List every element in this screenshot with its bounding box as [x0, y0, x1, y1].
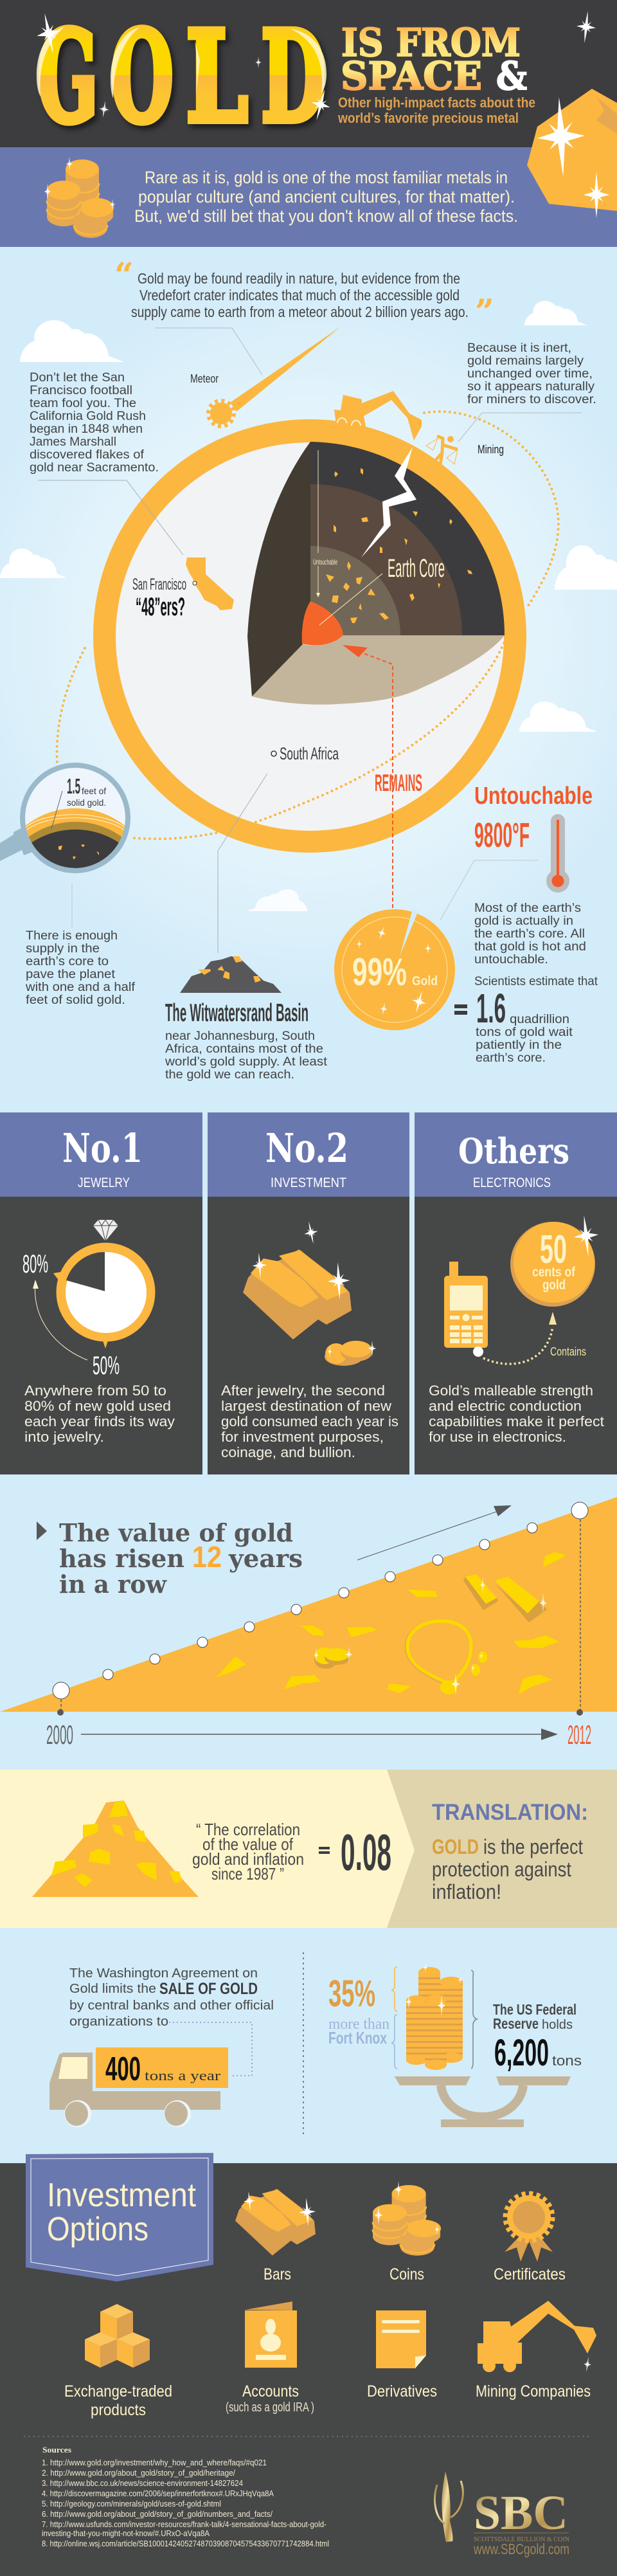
title highlights	[37, 27, 326, 98]
date guides	[57, 1519, 583, 1716]
heading: Others	[458, 1130, 569, 1172]
basin text: Africa, contains most of the	[165, 1042, 323, 1056]
panel: jewelry: 80%	[22, 1250, 48, 1278]
body text: Gold’s malleable strength	[429, 1383, 593, 1399]
35 percent more than fort knox: more than	[328, 2016, 389, 2033]
text: most of the earth's gold: untouchable.	[474, 953, 548, 966]
subtitle: Other high-impact facts about the	[338, 95, 535, 111]
panel: electronics	[415, 1112, 617, 1474]
federal reserve	[328, 1963, 582, 2127]
sources: 8. http://online.wsj.com/article/SB10001424052748703908704575433670771742884.html	[42, 2539, 329, 2548]
subheading: INVESTMENT	[271, 1175, 346, 1190]
sparkles	[251, 1220, 377, 1358]
quote text: Vredefort crater indicates that much of the accessible gold	[139, 287, 460, 304]
text: because it is inert: Because it is inert,	[467, 341, 571, 355]
sources: 2. http://www.gold.org/about_gold/story_of_gold/heritage/	[42, 2469, 235, 2478]
text: Gold limits the	[69, 1982, 156, 1996]
option: certificates: Certificates	[494, 2265, 566, 2283]
400 tons a year: 400	[105, 2051, 141, 2088]
text: san francisco football: Don’t let the San	[30, 371, 125, 385]
outer core layer	[310, 546, 400, 635]
mining label: Mining	[478, 443, 504, 456]
washington agreement	[49, 1966, 274, 2127]
translation text: TRANSLATION:	[432, 1800, 588, 1825]
text: enough supply	[25, 884, 136, 1007]
1.6 quadrillion tons: earth’s core.	[476, 1051, 546, 1065]
option: bars: Bars	[264, 2265, 291, 2283]
translation panel	[387, 1770, 617, 1928]
text: because it is inert: so it appears naturally	[467, 380, 595, 394]
option: accounts	[226, 2301, 314, 2415]
panel: investment options	[0, 2153, 617, 2576]
subtitle	[337, 95, 535, 126]
body text	[221, 1383, 398, 1460]
option: accounts: Accounts	[242, 2382, 299, 2400]
icon: gold mound	[32, 1800, 199, 1897]
body text: for use in electronics.	[429, 1429, 566, 1445]
icon: truck: tons a year	[145, 2067, 221, 2083]
body text: capabilities make it perfect	[429, 1413, 604, 1429]
untouchable pointer: Untouchable	[313, 558, 337, 567]
1.5 feet of solid gold label: feet of	[82, 786, 106, 796]
text: enough supply: pave the planet	[26, 968, 116, 981]
left wall	[247, 442, 310, 696]
correlation quote	[192, 1820, 304, 1883]
gold necklace	[406, 1621, 487, 1694]
data points	[53, 1502, 588, 1699]
time axis: 2000	[46, 1719, 73, 1750]
icon: coin stacks	[406, 1963, 463, 2070]
translation text: is the perfect	[483, 1835, 583, 1858]
sources: 5. http://geology.com/minerals/gold/uses-of-gold.shtml	[42, 2499, 221, 2508]
text: because it is inert: gold remains largely	[467, 354, 584, 368]
body text: coinage, and bullion.	[221, 1444, 355, 1460]
sky background	[0, 247, 617, 1112]
text: san francisco football: discovered flakes of	[30, 448, 145, 462]
title: GOLD: O	[111, 3, 174, 150]
reserve text	[493, 2001, 582, 2074]
dotted orbit paths	[57, 412, 559, 839]
text: enough supply: supply in the	[26, 942, 100, 956]
inner core	[302, 601, 343, 646]
braces	[391, 1967, 477, 2069]
equals 0.08: 0.08	[341, 1824, 391, 1881]
text: REMAINS	[375, 770, 422, 796]
witwatersrand basin: The Witwatersrand Basin	[165, 999, 308, 1027]
sparkles: header	[33, 10, 609, 218]
lightning crack	[361, 447, 416, 558]
opening quote mark: “	[114, 256, 134, 295]
option: coins	[373, 2181, 441, 2283]
1.6 quadrillion tons: 1.6	[476, 985, 506, 1031]
globe: Earth Core	[388, 554, 445, 583]
meteor label: Meteor	[190, 372, 219, 385]
heading marker	[37, 1521, 47, 1540]
globe	[93, 419, 526, 853]
basin text: near Johannesburg, South	[165, 1029, 315, 1043]
basin text: the gold we can reach.	[165, 1068, 294, 1082]
body text: for investment purposes,	[221, 1429, 384, 1445]
body text: each year finds its way	[24, 1413, 175, 1429]
text: san francisco football	[30, 371, 159, 475]
correlation quote: “ The correlation	[196, 1820, 300, 1839]
option: exchange-traded products: products	[91, 2401, 146, 2419]
clouds	[0, 301, 617, 911]
title: GOLD: D	[261, 3, 326, 150]
coin: 50 cents of gold: 50	[540, 1228, 567, 1272]
map: california: “48”ers?	[136, 593, 185, 621]
body text: largest destination of new	[221, 1398, 391, 1414]
translation text: GOLD	[432, 1835, 479, 1858]
heading: No.2	[265, 1125, 348, 1172]
label 50%: 50%	[93, 1352, 120, 1380]
body text: gold consumed each year is	[221, 1413, 398, 1429]
body text: and electric conduction	[429, 1398, 582, 1414]
body text	[24, 1383, 175, 1445]
text: because it is inert	[467, 341, 596, 406]
time axis	[46, 1719, 591, 1750]
sources	[42, 2445, 329, 2548]
reserve text: holds	[542, 2018, 573, 2032]
heading: 12	[192, 1540, 222, 1574]
sources: investing-that-you-might-not-know/#.URxO-aVqa8A	[42, 2529, 210, 2538]
heading: years	[228, 1544, 303, 1573]
banner	[26, 2153, 213, 2281]
subheading: ELECTRONICS	[473, 1175, 551, 1190]
sources: 4. http://discovermagazine.com/2006/sep/innerfortknox#.URxJHqVqa8A	[42, 2489, 274, 2498]
sources: 1. http://www.gold.org/investment/why_how_and_where/faqs/#q021	[42, 2458, 267, 2467]
icon: truck	[49, 2047, 228, 2127]
35 percent more than fort knox: 35%	[328, 1973, 375, 2015]
equals 0.08	[319, 1824, 391, 1881]
1.5 feet of solid gold label: 1.5	[67, 774, 80, 798]
text: enough supply: There is enough	[26, 929, 118, 943]
text: san francisco football: California Gold Rush	[30, 410, 146, 423]
basin text	[165, 1029, 328, 1082]
99 percent gold coin	[334, 909, 455, 1030]
contains arrow	[473, 1312, 586, 1364]
sources: 3. http://www.bbc.co.uk/news/science-environment-14827624	[42, 2479, 243, 2488]
closing quote mark: ”	[475, 293, 494, 332]
text	[69, 1966, 274, 2029]
untouchable pointer	[313, 450, 337, 597]
text: The Washington Agreement on	[69, 1966, 258, 1981]
icon: ring chart	[53, 1220, 156, 1348]
icon: gold nugget	[527, 89, 617, 211]
icon: excavator on globe	[334, 391, 422, 440]
icon: scale	[395, 2076, 571, 2127]
panel: correlation	[0, 1770, 617, 1928]
sparkles	[314, 1577, 547, 1696]
crust layer	[310, 442, 505, 635]
label: south africa: South Africa	[280, 744, 339, 763]
arrow: 50 to 80	[33, 1280, 87, 1360]
mining label	[458, 413, 582, 456]
text: organizations to	[69, 2015, 168, 2029]
banner: Investment	[47, 2177, 196, 2214]
logo: SBC: SCOTTSDALE BULLION & COIN	[474, 2535, 569, 2543]
gold bars	[463, 1574, 547, 1622]
icon: gold nuggets	[325, 1341, 373, 1366]
heading: No.1	[62, 1125, 143, 1172]
text: san francisco football: James Marshall	[30, 435, 116, 449]
text: enough supply: earth’s core to	[26, 955, 109, 968]
subheading: JEWELRY	[78, 1175, 130, 1190]
title: is from space: SPACE	[341, 54, 482, 99]
icon: gold bars	[243, 1249, 352, 1339]
intro band	[0, 147, 617, 247]
99 percent gold coin: 99%	[352, 950, 407, 993]
option: certificates	[494, 2194, 566, 2283]
gold coins	[314, 1647, 350, 1669]
mantle layer	[310, 484, 462, 635]
banner: Options	[47, 2211, 148, 2248]
translation text: protection against	[432, 1858, 571, 1881]
earth core label	[319, 554, 445, 625]
quote text: Gold may be found readily in nature, but evidence from the	[138, 270, 460, 287]
heading: The value of gold	[59, 1518, 293, 1547]
text: SALE OF GOLD	[159, 1980, 258, 1998]
body text: Anywhere from 50 to	[24, 1383, 166, 1399]
title: GOLD: G	[37, 3, 98, 150]
body text: into jewelry.	[24, 1429, 104, 1445]
reserve text: 6,200	[494, 2032, 549, 2074]
option: coins: Coins	[389, 2265, 424, 2283]
icon: coin stacks	[47, 159, 114, 238]
99 percent gold coin: Gold	[412, 974, 438, 988]
translation text	[432, 1800, 588, 1903]
gold scraps	[216, 1552, 565, 1694]
basin text: world’s gold supply. At least	[165, 1055, 328, 1069]
san francisco label: San Francisco	[132, 576, 186, 594]
option: exchange-traded products: Exchange-traded	[64, 2382, 172, 2400]
label: south africa	[271, 744, 339, 763]
correlation quote: since 1987 ”	[211, 1864, 284, 1883]
reserve text: Reserve	[493, 2015, 539, 2032]
remains arrow	[343, 645, 422, 908]
text: most of the earth's gold: Scientists estimate that	[474, 975, 598, 988]
translation text: inflation!	[432, 1880, 501, 1903]
quote	[114, 256, 494, 332]
map: california	[132, 558, 234, 621]
coin: 50 cents of gold	[510, 1214, 600, 1307]
text: by central banks and other official	[69, 1999, 274, 2013]
option: mining companies: Mining Companies	[476, 2382, 591, 2400]
text: most of the earth's gold: gold is actually in	[474, 914, 573, 928]
sources: 7. http://www.usfunds.com/investor-resources/frank-talk/4-sensational-facts-about-gold-	[42, 2520, 326, 2529]
coin: 50 cents of gold: gold	[542, 1278, 566, 1293]
text: because it is inert: for miners to discover.	[467, 393, 596, 406]
icon: miner	[426, 436, 458, 464]
correlation quote: of the value of	[202, 1835, 294, 1854]
logo: SBC	[434, 2471, 569, 2557]
35 percent more than fort knox	[328, 1973, 389, 2047]
option: derivatives: Derivatives	[367, 2382, 437, 2400]
witwatersrand basin	[165, 774, 328, 1082]
header band	[0, 0, 617, 150]
icon: mountain	[180, 956, 282, 993]
text: san francisco football: gold near Sacramento.	[30, 461, 159, 475]
panel: jewelry	[0, 1112, 202, 1474]
icon: thermometer	[546, 814, 569, 893]
text: 9800°F	[474, 816, 530, 855]
meteor	[155, 327, 341, 426]
sources: Sources	[42, 2445, 71, 2454]
option: derivatives	[367, 2310, 437, 2400]
correlation quote: gold and inflation	[192, 1849, 304, 1869]
text: most of the earth's gold	[474, 902, 598, 988]
heading	[59, 1518, 303, 1599]
option: accounts: (such as a gold IRA )	[226, 2400, 314, 2415]
text: enough supply: with one and a half	[25, 981, 136, 994]
reserve text: tons	[552, 2053, 582, 2069]
option: bars	[235, 2189, 317, 2283]
intro text: Rare as it is, gold is one of the most familiar metals in	[145, 168, 508, 187]
quote text: supply came to earth from a meteor about 2 billion years ago.	[131, 304, 469, 320]
intro text	[134, 168, 518, 226]
text: san francisco football: began in 1848 when	[30, 422, 143, 436]
text: san francisco football: team fool you. The	[30, 397, 136, 410]
title: is from space: &	[496, 54, 527, 99]
text: san francisco football: Francisco football	[30, 384, 132, 397]
title: GOLD: L	[186, 3, 248, 150]
intro text: popular culture (and ancient cultures, for that matter).	[138, 187, 515, 206]
text: enough supply: feet of solid gold.	[26, 993, 125, 1007]
icon: phone	[444, 1262, 488, 1348]
1.6 quadrillion tons: quadrillion	[510, 1013, 569, 1026]
1.5 feet of solid gold label	[67, 774, 106, 808]
text: because it is inert: unchanged over time,	[467, 367, 593, 381]
magnifier	[0, 763, 130, 873]
quote text	[131, 270, 469, 320]
body text: After jewelry, the second	[221, 1383, 385, 1399]
35 percent more than fort knox: Fort Knox	[328, 2028, 387, 2047]
1.6 quadrillion tons: patiently in the	[476, 1039, 562, 1052]
1.6 quadrillion tons: tons of gold wait	[476, 1026, 573, 1039]
logo: SBC: www.SBCgold.com	[473, 2541, 569, 2557]
heading: has risen	[59, 1544, 184, 1573]
1.5 feet of solid gold label: solid gold.	[67, 797, 106, 808]
trend arrow	[357, 1505, 512, 1560]
gold flecks	[326, 468, 472, 623]
title: is from space: IS FROM	[341, 21, 521, 66]
title: GOLD	[37, 3, 326, 150]
panel: investment	[208, 1112, 409, 1474]
option: mining companies	[476, 2301, 596, 2400]
1.6 quadrillion tons	[454, 985, 573, 1065]
text: most of the earth's gold: the earth’s core. All	[474, 927, 585, 941]
intro text: But, we'd still bet that you don't know all of these facts.	[134, 206, 518, 226]
chart: value of gold rising	[0, 1497, 617, 1750]
logo: SBC: SBC	[474, 2486, 568, 2540]
reserve text: The US Federal	[493, 2001, 577, 2018]
subtitle: world’s favorite precious metal	[337, 110, 519, 126]
text: most of the earth's gold: Most of the earth’s	[474, 902, 581, 915]
coin: 50 cents of gold: cents of	[532, 1265, 576, 1280]
title: is from space	[341, 21, 527, 99]
body text: 80% of new gold used	[24, 1398, 171, 1414]
text: most of the earth's gold: that gold is hot and	[474, 940, 586, 954]
heading: in a row	[59, 1570, 167, 1599]
floor	[252, 635, 505, 705]
contains arrow: Contains	[550, 1345, 586, 1358]
sources: 6. http://www.gold.org/about_gold/story_of_gold/numbers_and_facts/	[42, 2510, 273, 2519]
body text	[429, 1383, 604, 1445]
dotted connector	[169, 2022, 252, 2076]
option: exchange-traded products	[64, 2304, 172, 2419]
